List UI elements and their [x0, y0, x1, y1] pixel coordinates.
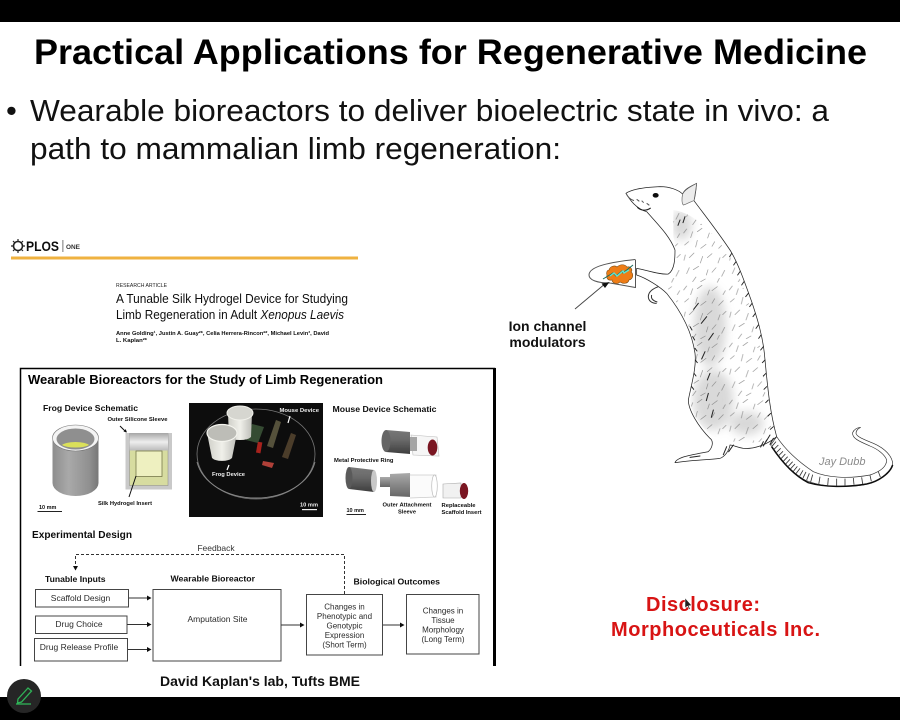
column headings: Biological Outcomes: [354, 576, 440, 586]
arrow to device: [575, 282, 610, 309]
PLOS ONE logo: PLOS: [26, 238, 59, 254]
orange rule: [11, 256, 358, 260]
article authors: [116, 330, 329, 344]
icon: wearable device on rat limb: [589, 260, 636, 288]
ion channel zigzag: [603, 265, 633, 279]
flow box labels: Drug Release Profile: [40, 642, 118, 652]
frog device schematic: Frog Device Schematic: [43, 403, 138, 413]
bullet text: Wearable bioreactors to deliver bioelectric state in vivo: a: [30, 93, 830, 128]
column headings: Wearable Bioreactor: [170, 574, 256, 584]
photo of devices: 10 mm: [300, 502, 318, 508]
PLOS ONE logo: [11, 238, 80, 254]
article authors: L. Kaplan²*: [116, 337, 148, 344]
rat dark fur accents: [678, 217, 773, 457]
artist credit: Jay Dubb: [818, 456, 865, 468]
mouse device schematic: Metal Protective Ring: [334, 458, 394, 464]
disclosure: Morphoceuticals Inc.: [611, 619, 820, 641]
article authors: Anne Golding¹, Justin A. Guay²*, Celia Herrera-Rincon²*, Michael Levin³, David: [116, 330, 329, 337]
orange bioreactor blob: [607, 265, 633, 283]
frog device schematic: [38, 403, 172, 512]
article label: RESEARCH ARTICLE: [116, 283, 167, 289]
label: ion channel modulators: modulators: [509, 334, 586, 350]
rat body: [626, 183, 777, 463]
panel: wearable bioreactors: [20, 368, 496, 666]
experimental design flowchart: [32, 530, 479, 661]
panel heading: Wearable Bioreactors for the Study of Limb Regeneration: [28, 373, 383, 387]
mouse device schematic: Sleeve: [398, 510, 417, 516]
icon: exploded mouse device: [346, 467, 468, 499]
feedback arrow: [73, 543, 344, 594]
article title: [116, 292, 348, 322]
flow box labels: Tissue: [431, 616, 455, 625]
PLOS ONE logo: ONE: [66, 245, 80, 251]
flowchart heading: Experimental Design: [32, 530, 132, 541]
flow box labels: [40, 593, 465, 652]
mouse device schematic: Mouse Device Schematic: [332, 404, 437, 414]
flow box labels: Morphology: [422, 626, 464, 634]
frog device schematic: 10 mm: [39, 505, 57, 511]
flow box labels: Scaffold Design: [51, 593, 110, 603]
rat ear: [682, 183, 697, 205]
mouse device schematic: [332, 404, 482, 516]
rat mouth: [637, 207, 651, 210]
flow box labels: Changes in: [423, 606, 463, 616]
mouse device schematic: 10 mm: [346, 508, 364, 514]
flow box labels: Drug Choice: [55, 619, 103, 629]
flow boxes: [34, 590, 479, 661]
mouse device schematic: Replaceable: [442, 503, 476, 509]
rat shading: [672, 210, 763, 435]
photo of devices: Frog Device: [212, 472, 246, 478]
flow box labels: Genotypic: [326, 622, 363, 630]
mouse device schematic: Outer Attachment: [382, 502, 432, 508]
bullet text: path to mammalian limb regeneration:: [30, 131, 561, 166]
flow box labels: (Short Term): [322, 640, 367, 650]
rat eye: [653, 193, 659, 198]
rat fur texture: [668, 213, 771, 443]
label: ion channel modulators: Ion channel: [509, 318, 586, 334]
frog device schematic: Silk Hydrogel Insert: [98, 501, 152, 507]
flow box labels: Amputation Site: [187, 614, 248, 624]
title: Practical Applications for Regenerative Medicine: [34, 33, 867, 72]
disclosure: Disclosure:: [646, 594, 760, 616]
column headings: [45, 574, 440, 586]
icon: frog device cross-section: [120, 426, 172, 497]
label: ion channel modulators: [509, 318, 586, 350]
mouse device schematic: Scaffold Insert: [442, 510, 482, 516]
small devices: [267, 420, 281, 448]
rat tail: [771, 427, 893, 487]
bullet text: [6, 93, 830, 166]
photo of devices: Mouse Device: [280, 408, 320, 414]
flow box labels: (Long Term): [422, 635, 465, 644]
flow box labels: Changes in: [324, 602, 365, 612]
column headings: Tunable Inputs: [45, 574, 106, 584]
feedback arrow: Feedback: [197, 543, 235, 553]
icon: pencil button: [7, 679, 41, 713]
paper header: PLOS ONE article: [11, 238, 358, 344]
rat back-edge hatching: [690, 253, 773, 429]
bullet text: •: [6, 93, 17, 128]
frog device schematic: Outer Silicone Sleeve: [108, 417, 168, 423]
bottom black bar: [0, 697, 900, 720]
cursor: [685, 598, 692, 610]
illustration: standing rat: [626, 183, 893, 487]
flow box labels: Expression: [325, 631, 364, 640]
white cups: [228, 413, 252, 440]
top black bar: [0, 0, 900, 22]
flow arrows: [127, 596, 404, 652]
article title: A Tunable Silk Hydrogel Device for Studying: [116, 292, 348, 306]
icon: assembled mouse device: [382, 430, 439, 456]
flow box labels: Phenotypic and: [317, 612, 372, 621]
icon: frog device cylinder: [52, 425, 98, 496]
disclosure: [611, 594, 820, 641]
caption: lab credit: David Kaplan's lab, Tufts BME: [160, 673, 360, 689]
article title: Limb Regeneration in Adult Xenopus Laevis: [116, 308, 344, 322]
photo of devices: [189, 403, 323, 517]
rat paw: [648, 287, 658, 303]
panel frame: [20, 368, 494, 666]
